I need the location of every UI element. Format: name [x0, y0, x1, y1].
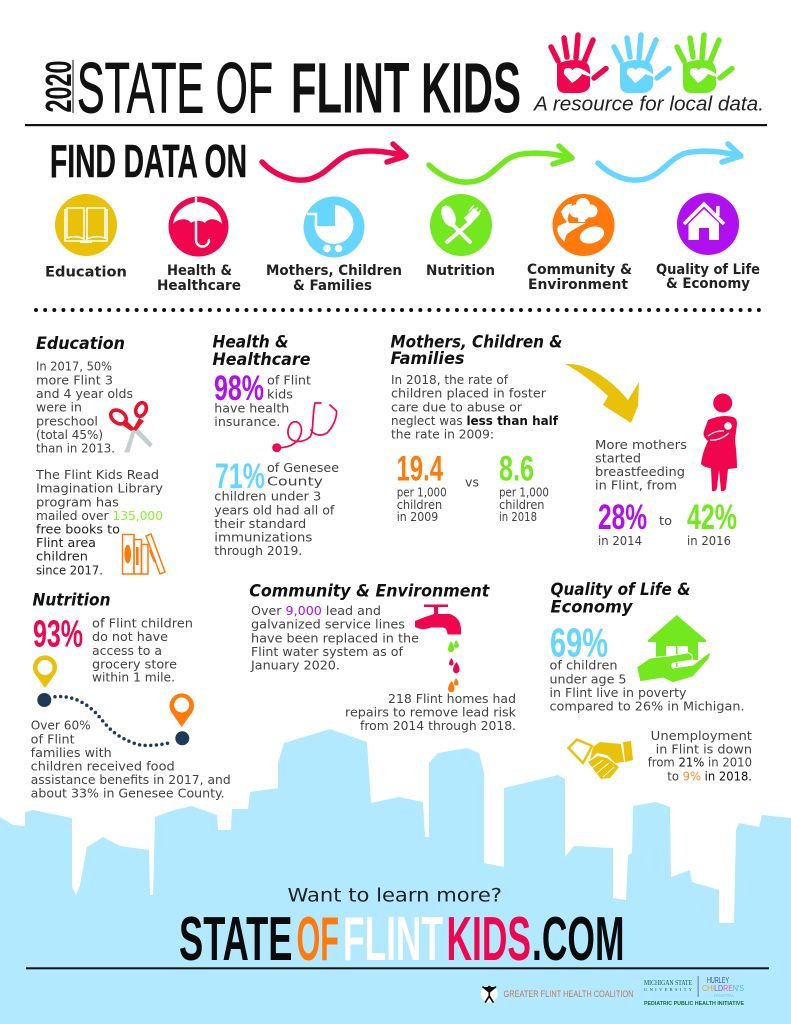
- text: immunizations: immunizations: [214, 529, 312, 544]
- website url: FLINT: [343, 905, 443, 974]
- text: breastfeeding: breastfeeding: [595, 464, 685, 479]
- text: foster care: In 2018, the rate of: [391, 372, 509, 387]
- label: community: Community &: [527, 262, 632, 278]
- text: imagination library: children: [36, 549, 88, 564]
- label: quality of life: Quality of Life: [656, 262, 760, 278]
- stat: 42%: 42%: [687, 498, 737, 537]
- label: quality of life: [656, 262, 760, 292]
- text: grocery access: of Flint children: [92, 616, 193, 631]
- logo: michigan state university and hurley: CHILDREN'S: [702, 984, 744, 993]
- text: grocery access: do not have: [92, 629, 168, 644]
- text: food assistance: families with: [31, 745, 112, 760]
- title: 2020: [38, 60, 79, 112]
- text: immunizations: through 2019.: [214, 543, 302, 558]
- stat: 28%: 28%: [598, 498, 647, 537]
- text: food assistance: Over 60%: [31, 718, 91, 733]
- stat: 71%: 71%: [215, 457, 265, 496]
- text: preschool: and 4 year olds: [36, 386, 133, 401]
- arrow: red: [262, 144, 406, 180]
- label: health: [157, 263, 241, 294]
- title: FLINT KIDS: [291, 50, 521, 128]
- text: preschool: preschool: [36, 413, 98, 428]
- icon: blue hand: [614, 35, 669, 93]
- label: community: [527, 262, 632, 293]
- heading: [550, 580, 690, 616]
- panel: health and healthcare: [212, 332, 339, 558]
- text: foster care: the rate in 2009:: [391, 426, 494, 441]
- icon labels: [45, 262, 760, 294]
- icon: faucet: [415, 604, 461, 634]
- stat: 8.6: 8.6: [499, 450, 534, 488]
- icon: water drops: [448, 640, 460, 692]
- text: immunizations: County: [267, 474, 324, 489]
- stat: 28%: in 2014: [598, 533, 642, 548]
- stat: 42%: [687, 498, 737, 548]
- text: unemployment: from 21% in 2010: [648, 755, 752, 770]
- text: imagination library: Imagination Library: [36, 481, 164, 496]
- icon: scissors: [108, 401, 152, 452]
- title: STATE OF: [77, 50, 273, 128]
- text: poverty: [550, 658, 744, 713]
- stat: 19.4: children: [397, 497, 442, 512]
- text: unemployment: [648, 728, 752, 784]
- stat: 42%: in 2016: [687, 533, 731, 548]
- tagline: A resource for local data.: [532, 92, 764, 116]
- text: immunizations: children under 3: [214, 489, 321, 504]
- text: imagination library: The Flint Kids Read: [35, 467, 159, 482]
- heading: Education: [36, 334, 125, 353]
- text: imagination library: Flint area: [36, 535, 96, 550]
- text: grocery access: grocery store: [92, 656, 177, 671]
- text: health insurance: insurance.: [214, 414, 280, 429]
- text: foster care: neglect was less than half: [391, 413, 559, 428]
- text: home repairs: repairs to remove lead risk: [345, 705, 517, 720]
- heading: Health &: [212, 332, 288, 352]
- website url: OF: [296, 905, 339, 974]
- icon: mothers stroller: [304, 196, 364, 258]
- text: food assistance: [31, 718, 231, 801]
- text: food assistance: about 33% in Genesee County.: [31, 786, 225, 801]
- text: unemployment: in Flint is down: [656, 741, 752, 756]
- text: health insurance: kids: [267, 386, 293, 401]
- stat: 8.6: per 1,000: [499, 485, 549, 500]
- stat: 28%: [598, 498, 647, 548]
- icon: green hand: [677, 35, 732, 93]
- text: breastfeeding: More mothers: [595, 437, 687, 452]
- text: poverty: in Flint live in poverty: [550, 685, 687, 700]
- logo: michigan state university and hurley: MICHIGAN STATE: [644, 980, 692, 987]
- website url: STATE: [179, 905, 292, 974]
- heading: [390, 332, 562, 368]
- title: [38, 50, 521, 128]
- logo: greater flint health coalition: GREATER FLINT HEALTH COALITION: [504, 989, 634, 1000]
- stat: 8.6: [499, 450, 549, 524]
- label: community: Environment: [528, 277, 628, 293]
- text: health insurance: have health: [214, 401, 289, 416]
- heading: [212, 332, 310, 369]
- text: unemployment: to 9% in 2018.: [667, 769, 752, 784]
- stat: 98%: 98%: [214, 369, 264, 408]
- arrow: blue: [598, 144, 741, 180]
- logo: michigan state university and hurley: HOSPITAL: [714, 993, 734, 998]
- text: breastfeeding: started: [595, 450, 641, 465]
- logo: michigan state university and hurley: UNIVERSITY: [644, 987, 693, 992]
- route between pins: [37, 693, 189, 745]
- text: breastfeeding: [595, 437, 687, 492]
- icon: mother and baby: [701, 394, 737, 491]
- text: immunizations: of Genesee: [267, 460, 339, 475]
- icon: health umbrella: [168, 196, 228, 256]
- text: foster care: care due to abuse or: [391, 399, 523, 414]
- panel: mothers, children and families: [390, 332, 737, 548]
- text: imagination library: since 2017.: [36, 562, 103, 577]
- heading: Community & Environment: [249, 582, 490, 601]
- heading: find data on: FIND DATA ON: [50, 135, 247, 187]
- text: preschool: In 2017, 50%: [36, 359, 112, 374]
- heading: Families: [390, 349, 465, 368]
- website url: KIDS: [446, 905, 531, 974]
- text: immunizations: years old had all of: [214, 502, 335, 517]
- text: preschool: more Flint 3: [36, 372, 113, 387]
- icon: community tree and road: [552, 194, 614, 256]
- icon: orange pin: [169, 693, 194, 727]
- icon: house in hand: [637, 615, 710, 683]
- panel: nutrition: [31, 590, 231, 801]
- heading: Quality of Life &: [550, 580, 690, 599]
- text: grocery access: within 1 mile.: [92, 670, 175, 685]
- text: poverty: of children: [550, 658, 618, 673]
- icon: quality of life house: [677, 193, 739, 255]
- stat: 69%: 69%: [550, 620, 608, 666]
- label: mothers: [266, 263, 402, 294]
- logo: michigan state university and hurley: [644, 976, 745, 1007]
- heading: Healthcare: [212, 350, 310, 369]
- stat: 8.6: in 2018: [499, 509, 537, 524]
- text: foster care: children placed in foster: [391, 386, 547, 401]
- text: preschool: (total 45%): [36, 427, 103, 442]
- icon: yellow pin: [33, 655, 57, 688]
- text: lead lines: Flint water system as of: [251, 644, 404, 659]
- text: lead lines: have been replaced in the: [251, 630, 419, 645]
- text: grocery access: [92, 616, 193, 685]
- text: imagination library: free books to: [36, 521, 120, 536]
- arrow: yellow curved: [565, 364, 639, 423]
- arrow: green: [429, 146, 572, 182]
- icon: three handprints: [551, 35, 732, 93]
- panel: education: [35, 334, 165, 577]
- text: lead lines: Over 9,000 lead and: [251, 603, 381, 618]
- text: preschool: [36, 359, 133, 456]
- text: poverty: compared to 26% in Michigan.: [550, 698, 744, 713]
- panel: community and environment: [249, 582, 517, 733]
- text: poverty: under age 5: [550, 671, 626, 686]
- text: food assistance: children received food: [31, 758, 175, 773]
- stat: 8.6: children: [499, 497, 544, 512]
- label: mothers: Mothers, Children: [266, 263, 402, 279]
- heading: Mothers, Children &: [390, 332, 562, 352]
- text: home repairs: from 2014 through 2018.: [360, 718, 516, 733]
- stat: 93%: 93%: [33, 614, 83, 656]
- icon: books: [122, 534, 165, 574]
- text: food assistance: assistance benefits in 2017, and: [31, 772, 231, 787]
- website url: [179, 905, 624, 974]
- label: to: to: [659, 513, 672, 528]
- label: health: Health &: [167, 263, 232, 279]
- text: lead lines: January 2020.: [250, 657, 340, 672]
- label: nutrition: Nutrition: [426, 263, 495, 279]
- text: preschool: were in: [36, 400, 82, 415]
- label: mothers: & Families: [293, 278, 372, 294]
- call to action: Want to learn more?: [288, 884, 502, 906]
- icon: stethoscope: [272, 403, 337, 452]
- text: health insurance: of Flint: [267, 372, 311, 387]
- logo: michigan state university and hurley: PEDIATRIC PUBLIC HEALTH INITIATIVE: [644, 1001, 745, 1007]
- text: lead lines: galvanized service lines: [251, 617, 405, 632]
- icon: handshake: [568, 740, 633, 779]
- icon: red hand: [551, 35, 606, 93]
- stat: 19.4: [396, 450, 447, 524]
- text: foster care: [391, 372, 559, 441]
- text: preschool: than in 2013.: [36, 441, 115, 456]
- heading: Nutrition: [32, 590, 110, 610]
- panel: quality of life and economy: [550, 580, 752, 784]
- text: imagination library: [35, 467, 164, 577]
- icon: education book: [55, 194, 117, 256]
- text: food assistance: of Flint: [31, 731, 75, 746]
- text: health insurance: [214, 372, 311, 429]
- text: immunizations: their standard: [214, 516, 306, 531]
- text: breastfeeding: in Flint, from: [595, 477, 677, 492]
- text: grocery access: access to a: [92, 643, 162, 658]
- text: imagination library: mailed over 135,000: [36, 508, 163, 523]
- label: health: Healthcare: [157, 278, 241, 294]
- skyline background: [0, 729, 791, 1024]
- label: education: Education: [45, 264, 127, 280]
- text: immunizations: [214, 460, 339, 558]
- label: vs: vs: [465, 474, 479, 489]
- stat: 19.4: per 1,000: [397, 485, 447, 500]
- icon: nutrition fork and spoon: [430, 194, 492, 256]
- text: home repairs: 218 Flint homes had: [388, 691, 516, 706]
- text: home repairs: [345, 691, 517, 733]
- text: unemployment: Unemployment: [651, 728, 752, 743]
- stat: 19.4: in 2009: [397, 509, 438, 524]
- logo: greater flint health coalition: [481, 986, 634, 1002]
- label: quality of life: & Economy: [666, 276, 750, 292]
- website url: .COM: [532, 905, 624, 974]
- stat: 19.4: 19.4: [396, 450, 443, 488]
- logo: michigan state university and hurley: HURLEY: [707, 976, 729, 985]
- text: lead lines: [250, 603, 419, 672]
- text: imagination library: program has: [36, 494, 119, 509]
- heading: Economy: [550, 597, 634, 616]
